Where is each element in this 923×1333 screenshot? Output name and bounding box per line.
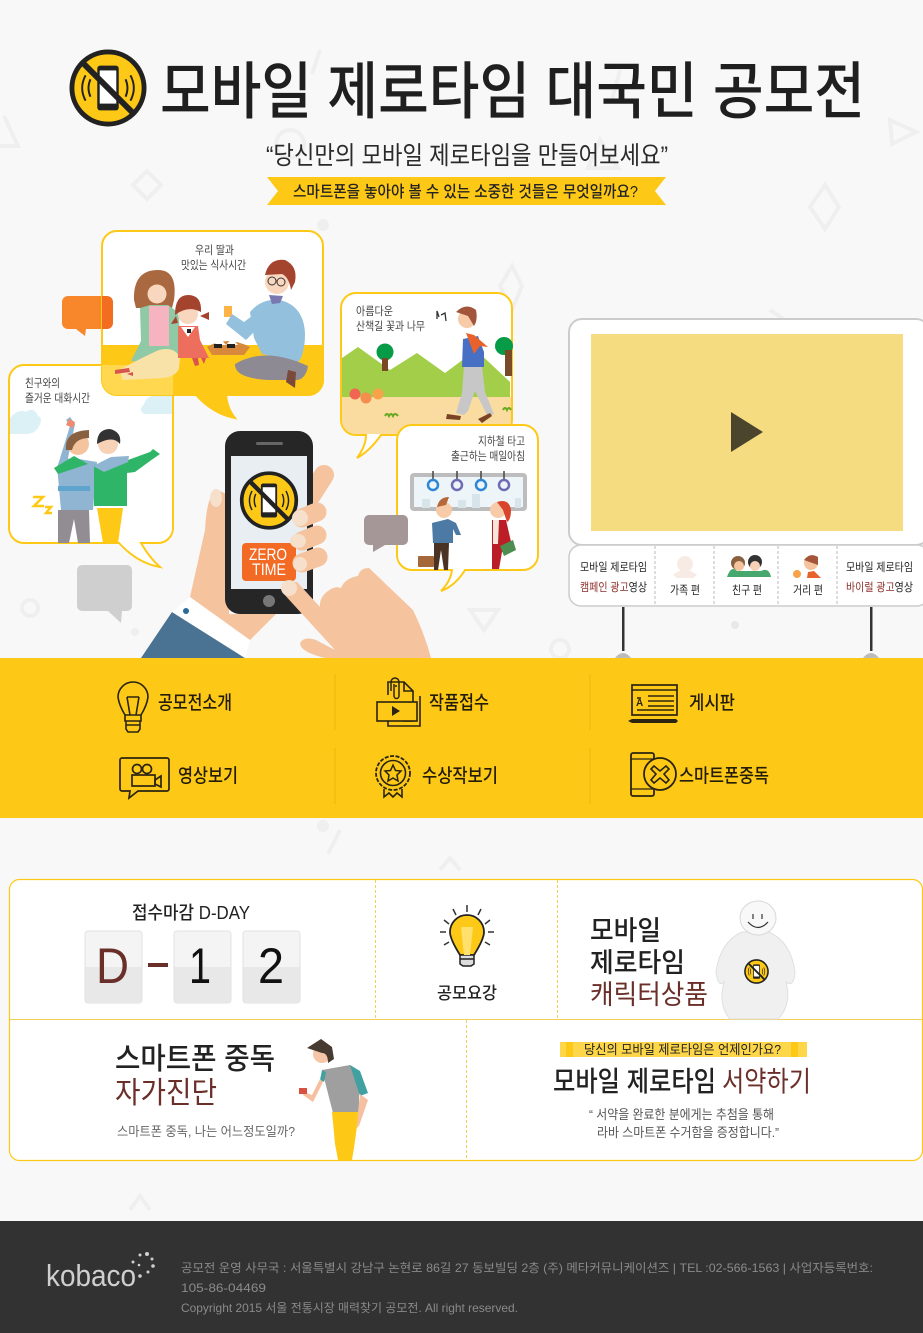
walking caption: 아름다운 (356, 305, 393, 318)
flip card: 2 (243, 931, 300, 1003)
phone (225, 431, 313, 614)
icon: no phone on screen (242, 473, 296, 528)
tab: viral (846, 560, 913, 594)
subway caption: 지하철 타고 (478, 434, 525, 448)
self diagnosis: 자가진단 (115, 1077, 217, 1110)
speech bubble: friends (9, 365, 173, 567)
man (226, 314, 254, 340)
illustration: two friends (33, 417, 160, 543)
tab: campaign (580, 560, 647, 594)
kobaco logo: kobaco (46, 1258, 136, 1293)
info card (10, 880, 922, 1160)
tab: family (670, 556, 700, 597)
pledge: 모바일 제로타임 (553, 1066, 716, 1097)
tab: viral: 모바일 제로타임 (846, 560, 913, 574)
self diagnosis: 스마트폰 중독, 나는 어느정도일까? (117, 1124, 295, 1139)
pledge: “ 서약을 완료한 분에게는 추첨을 통해 (589, 1107, 774, 1122)
family caption: 우리 딸과 (195, 243, 234, 257)
nav: board (628, 685, 735, 723)
nav: board: 게시판 (689, 692, 735, 714)
nav: smartphone addiction (631, 753, 769, 796)
nav: submit (377, 678, 489, 726)
character goods: 제로타임 (590, 948, 685, 978)
tab: campaign: 모바일 제로타임 (580, 560, 647, 574)
nav: video (120, 758, 238, 798)
speech bubble: family (102, 231, 324, 418)
friends caption (25, 377, 90, 405)
friends caption: 즐거운 대화시간 (25, 392, 90, 405)
walking caption: 산책길 꽃과 나무 (356, 319, 425, 333)
icon: no phone badge (745, 960, 768, 983)
footer: 105-86-04469 (181, 1281, 266, 1295)
contest guidelines (437, 905, 497, 1003)
pledge: 당신의 모바일 제로타임은 언제인가요? (584, 1042, 781, 1057)
self diagnosis: 스마트폰 중독 (115, 1043, 275, 1076)
clouds (10, 392, 172, 434)
character goods (590, 901, 795, 1019)
character goods: 캐릭터상품 (590, 980, 708, 1010)
nav: submit: 작품접수 (429, 692, 489, 714)
fingers (302, 512, 318, 563)
illustration: subway commuters (412, 471, 525, 570)
rice bowl (207, 341, 250, 355)
family caption: 맛있는 식사시간 (181, 259, 246, 272)
icon: light bulb (440, 905, 494, 966)
speech bubble: grey decorative (77, 565, 132, 623)
nav: contest intro: 공모전소개 (158, 692, 232, 714)
left hand palm (190, 491, 276, 646)
illustration: family picnic (115, 260, 308, 388)
subway caption: 출근하는 매일아침 (451, 449, 525, 463)
zero time badge (242, 543, 296, 581)
flip card: 2: 2 (258, 938, 284, 994)
footer copyright: Copyright 2015 서울 전통시장 매력찾기 공모전. All right reserved. (181, 1301, 518, 1315)
girl (178, 304, 198, 324)
video panel (569, 319, 923, 545)
speech bubble: subway (397, 425, 538, 591)
sleeve (141, 612, 245, 658)
illustration: hills and walking man (342, 306, 513, 434)
ribbon banner: 스마트폰을 놓아야 볼 수 있는 소중한 것들은 무엇일까요? (293, 183, 638, 201)
index finger behind phone (308, 475, 324, 500)
nav: smartphone addiction: 스마트폰중독 (679, 765, 769, 787)
friends caption: 친구와의 (25, 377, 60, 390)
flip card: 1: 1 (189, 938, 211, 994)
character goods: 모바일 (590, 916, 661, 946)
illustration: hands holding phone (141, 431, 431, 658)
tab: street (793, 555, 823, 597)
woman (134, 270, 175, 308)
subtitle quote: “당신만의 모바일 제로타임을 만들어보세요” (266, 142, 668, 170)
flip card: D (85, 931, 142, 1003)
yellow navigation band (0, 658, 923, 818)
pledge (553, 1042, 811, 1140)
nav: video: 영상보기 (178, 765, 238, 787)
flip card: 1 (174, 931, 231, 1003)
icon: no phone logo (72, 52, 144, 124)
nav: contest intro (118, 682, 232, 732)
tab: friends (727, 555, 771, 597)
tab: viral: 바이럴 광고영상 (846, 581, 913, 594)
speech bubble: mauve (364, 515, 408, 552)
illustration: mascot (716, 901, 795, 1019)
d-day counter: 접수마감 D-DAY (132, 903, 250, 923)
footer (0, 1221, 923, 1333)
nav: awards: 수상작보기 (422, 765, 498, 787)
self diagnosis (115, 1039, 368, 1160)
nav: board: A (636, 698, 643, 709)
subway caption (451, 434, 525, 463)
tv stand poles (615, 607, 879, 658)
tab: street: 거리 편 (793, 584, 823, 597)
contest guidelines: 공모요강 (437, 984, 497, 1003)
speech bubble: walking path (341, 293, 513, 458)
pledge: 라바 스마트폰 수거함을 증정합니다.” (597, 1125, 779, 1140)
icon: play (731, 412, 763, 452)
zero time badge: TIME (252, 560, 286, 579)
tab: family: 가족 편 (670, 584, 700, 597)
nav: awards (376, 756, 498, 797)
right hand (283, 568, 431, 658)
video tabs (569, 545, 923, 606)
footer contact text: 공모전 운영 사무국 : 서울특별시 강남구 논현로 86길 27 동보빌딩 2층 (주) 메타커뮤니케이션즈 | TEL :02-566-1563 | 사업자등록번호: (181, 1261, 873, 1275)
tab: campaign: 캠페인 광고영상 (580, 581, 647, 594)
zero time badge: ZERO (249, 545, 287, 564)
pledge: 서약하기 (722, 1066, 811, 1097)
family caption (181, 243, 246, 272)
tab: friends: 친구 편 (732, 584, 762, 597)
d-day counter (85, 903, 300, 1003)
speech bubble: orange (62, 296, 113, 336)
flip card: D: D (96, 938, 129, 994)
illustration: man with phone (299, 1039, 368, 1160)
walking caption (356, 305, 425, 333)
ribbon banner (267, 177, 666, 205)
